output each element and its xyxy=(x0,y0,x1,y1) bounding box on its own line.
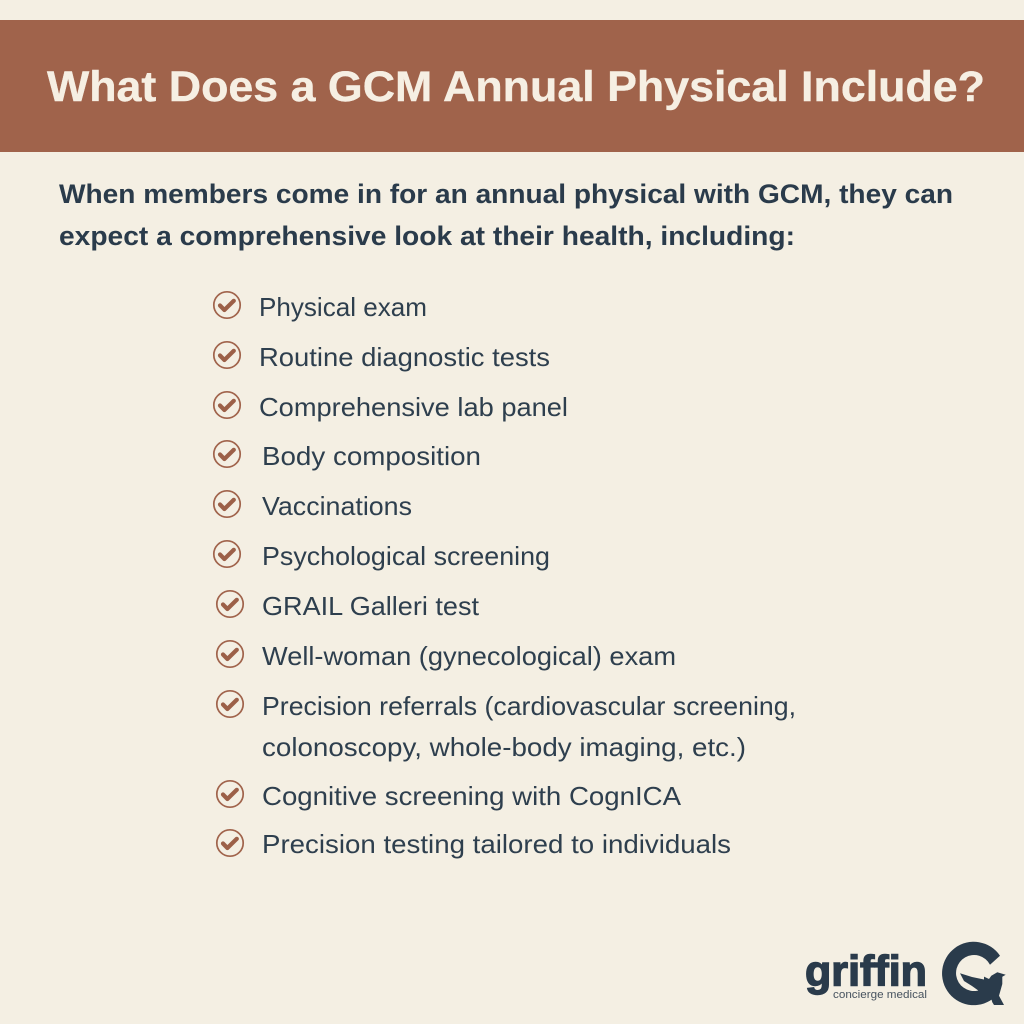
logo tagline: concierge medical xyxy=(833,989,927,1001)
item: routine diagnostic tests: Routine diagnostic tests xyxy=(259,342,550,372)
griffin logo xyxy=(805,942,1006,1005)
intro text xyxy=(59,179,953,251)
item: cognitive screening: Cognitive screening with CognICA xyxy=(262,781,682,811)
intro text: expect a comprehensive look at their health, including: xyxy=(59,221,795,251)
item: comprehensive lab panel: Comprehensive lab panel xyxy=(259,392,568,422)
item: body composition: Body composition xyxy=(262,441,481,471)
item: precision referrals xyxy=(217,691,796,762)
item: physical exam: Physical exam xyxy=(259,292,427,322)
item: psychological screening: Psychological screening xyxy=(262,541,550,571)
item: precision testing: Precision testing tailored to individuals xyxy=(262,829,731,859)
logo wordmark: griffin xyxy=(805,948,927,996)
G ring xyxy=(942,942,1000,1005)
logo emblem: G with griffin xyxy=(942,942,1006,1005)
checklist xyxy=(214,292,796,859)
item: GRAIL Galleri test: GRAIL Galleri test xyxy=(262,591,480,621)
griffin bird xyxy=(960,972,1006,1005)
intro text: When members come in for an annual physical with GCM, they can xyxy=(59,179,953,209)
item: vaccinations: Vaccinations xyxy=(262,491,412,521)
item: precision referrals: Precision referrals (cardiovascular screening, xyxy=(262,691,796,721)
item: precision referrals: colonoscopy, whole-body imaging, etc.) xyxy=(262,732,746,762)
item: well-woman exam: Well-woman (gynecological) exam xyxy=(262,641,676,671)
header banner xyxy=(0,20,1024,152)
title: What Does a GCM Annual Physical Include? xyxy=(47,63,985,111)
